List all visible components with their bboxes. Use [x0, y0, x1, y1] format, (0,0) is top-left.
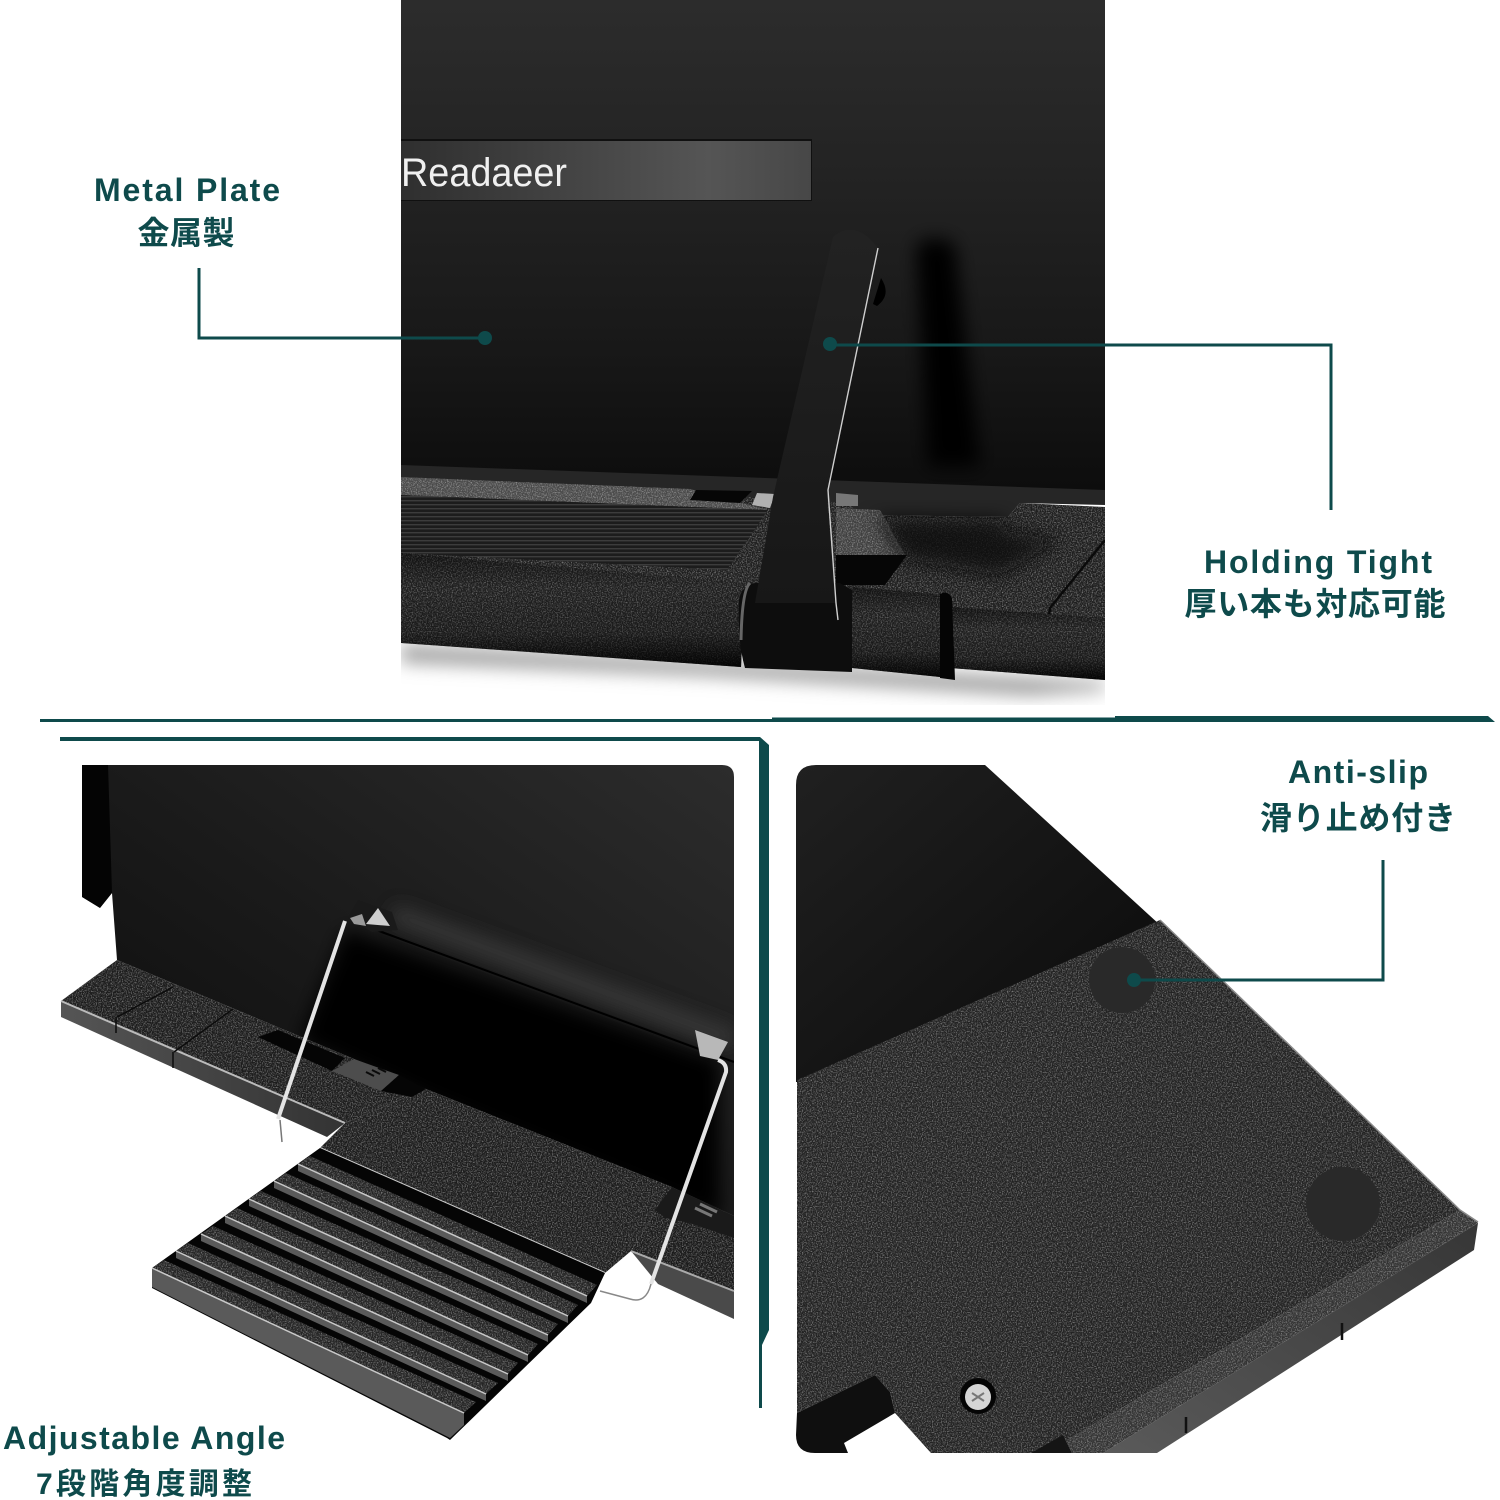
callout: metal plate — [94, 172, 492, 345]
callout: metal plate: 金属製 — [138, 215, 234, 251]
rule: horizontal divider — [40, 716, 1495, 722]
rail slot — [258, 1030, 734, 1238]
nameplate — [401, 139, 812, 201]
callout: anti-slip: 滑り止め付き — [1260, 800, 1456, 836]
foot pad: lower — [1306, 1167, 1380, 1241]
base of stand — [401, 465, 1105, 680]
arm shadow — [916, 238, 980, 467]
front rail — [61, 960, 734, 1291]
ridged ladder — [152, 1148, 605, 1440]
metal wire — [278, 921, 726, 1300]
callout: adjustable angle: Adjustable Angle — [3, 1420, 285, 1456]
wire bracket: right — [695, 1030, 728, 1060]
callout: holding tight: 厚い本も対応可能 — [1184, 586, 1446, 622]
callout: holding tight: Holding Tight — [1204, 544, 1432, 580]
foot pad: upper — [1089, 947, 1155, 1013]
panel: anti-slip photo — [796, 765, 1478, 1453]
callout: anti-slip — [1127, 754, 1456, 987]
callout: holding tight — [823, 337, 1446, 622]
rule: inner frame — [60, 737, 769, 1408]
nameplate: Readaeer — [401, 151, 567, 195]
wire bracket: left — [348, 900, 398, 932]
arm — [739, 230, 886, 672]
panel: adjustable angle photo — [61, 765, 734, 1440]
callout: adjustable angle — [3, 1420, 285, 1500]
callout: metal plate: Metal Plate — [94, 172, 280, 208]
callout: anti-slip: Anti-slip — [1288, 754, 1428, 790]
screw — [960, 1378, 996, 1414]
panel: metal plate photo — [401, 0, 1105, 695]
